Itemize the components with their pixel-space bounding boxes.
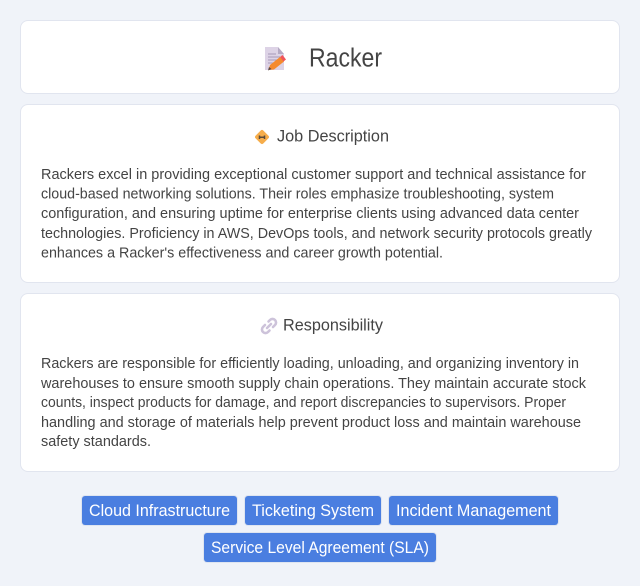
text block: responsibility: safety standards. bbox=[41, 434, 151, 450]
text block: responsibility bbox=[40, 356, 587, 450]
panel: title card bbox=[20, 20, 620, 94]
tag: service level agreement: Service Level Agreement (SLA) bbox=[211, 538, 429, 557]
text block: responsibility: handling and storage of materials help prevent product loss and maintain warehouse bbox=[41, 415, 581, 431]
icon: construction diamond bbox=[255, 130, 269, 144]
icon: memo with pencil bbox=[265, 47, 286, 70]
text block: job description: Rackers excel in providing exceptional customer support and technical assistance for bbox=[41, 167, 586, 183]
text block: job description: technologies. Proficiency in AWS, DevOps tools, and network security protocols greatly bbox=[41, 226, 593, 242]
text block: job description: enhances a Racker's effectiveness and career growth potential. bbox=[41, 246, 443, 262]
panel: responsibility bbox=[20, 293, 620, 472]
text block: job description: cloud-based networking solutions. Their roles emphasize troubleshooting, system bbox=[41, 186, 554, 202]
tag: cloud infrastructure: Cloud Infrastructure bbox=[89, 501, 230, 520]
title: Racker bbox=[309, 44, 382, 72]
heading: responsibility: Responsibility bbox=[283, 316, 383, 334]
tag: incident management: Incident Management bbox=[396, 501, 551, 520]
tag: service level agreement bbox=[204, 533, 436, 562]
text block: responsibility: Rackers are responsible for efficiently loading, unloading, and organizing inventory in bbox=[41, 356, 579, 372]
icon: link bbox=[260, 318, 278, 334]
text block: job description: configuration, and ensuring uptime for enterprise clients using advanced data center bbox=[41, 206, 579, 222]
tag: cloud infrastructure bbox=[82, 496, 237, 525]
heading: job description: Job Description bbox=[277, 126, 389, 146]
tag: ticketing system: Ticketing System bbox=[252, 501, 374, 520]
text block: responsibility: warehouses to ensure smooth supply chain operations. They maintain accurate stock bbox=[40, 376, 587, 392]
text block: responsibility: counts, inspect products for damage, and report discrepancies to supervisors. Proper bbox=[41, 395, 566, 411]
text block: job description bbox=[41, 167, 593, 262]
tag: ticketing system bbox=[245, 496, 381, 525]
tag: incident management bbox=[389, 496, 558, 525]
panel: job description bbox=[20, 104, 620, 283]
